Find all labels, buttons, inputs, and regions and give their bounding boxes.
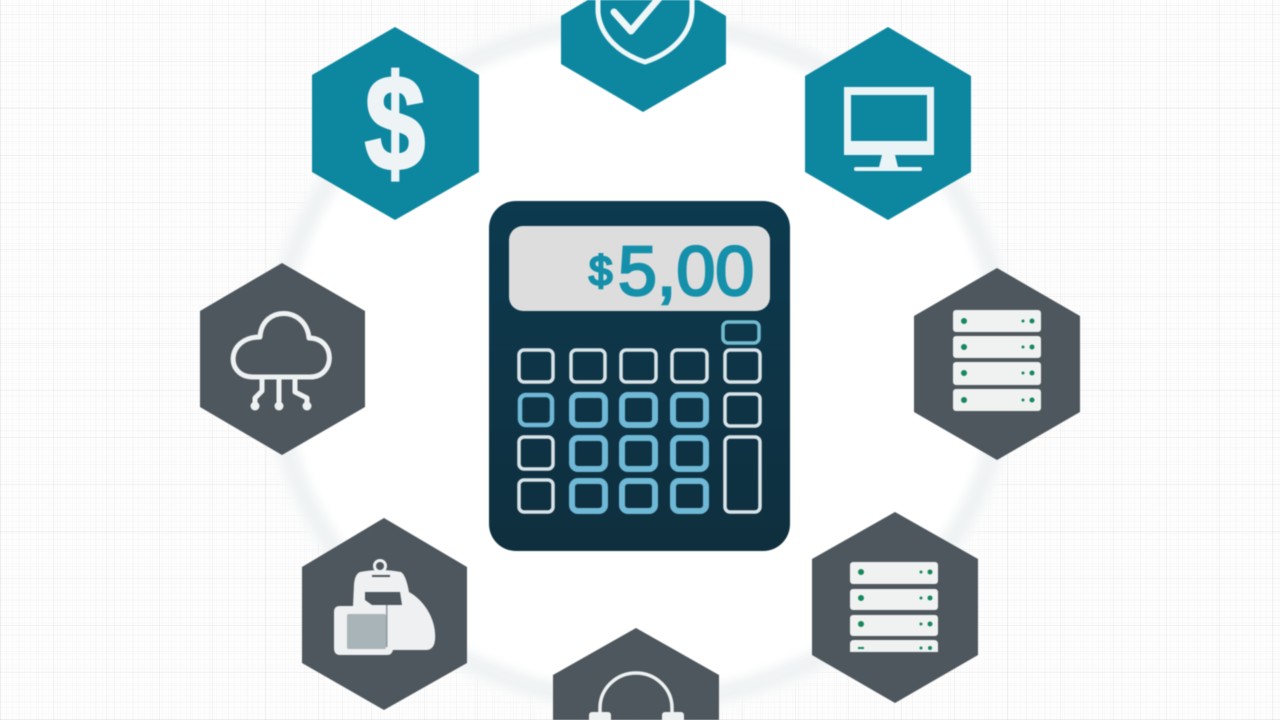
icon: server rack: [953, 310, 1041, 411]
calculator: [489, 201, 790, 551]
calculator body: [489, 201, 790, 551]
hexagon: headset: [553, 628, 719, 720]
top small key: [723, 322, 759, 343]
hexagon: monitor: [805, 27, 971, 220]
icon: server rack: [850, 562, 938, 652]
icon: bag and clipboard: [334, 560, 435, 655]
icon: shield with check: [598, 0, 692, 62]
hexagon: shield: [561, 0, 726, 112]
blue keys: [520, 395, 706, 511]
white central disc: [268, 12, 1012, 712]
connecting ring: [274, 22, 1006, 702]
icon: cloud network: [233, 313, 329, 405]
icon: monitor: [844, 87, 934, 171]
hexagon: server rack right: [914, 268, 1080, 460]
display amount: 5,00: [618, 232, 754, 310]
calculator display: [509, 226, 770, 311]
display amount: $: [589, 247, 612, 294]
hexagon: bag: [302, 518, 467, 710]
icon: headset: [589, 673, 684, 720]
hexagon: cloud: [200, 263, 365, 455]
circuit nodes: [250, 402, 312, 410]
icon: dollar sign: $: [365, 49, 425, 200]
hexagon: server rack lower: [812, 512, 978, 703]
white keys: [519, 350, 760, 512]
hexagon: dollar: [312, 27, 479, 220]
